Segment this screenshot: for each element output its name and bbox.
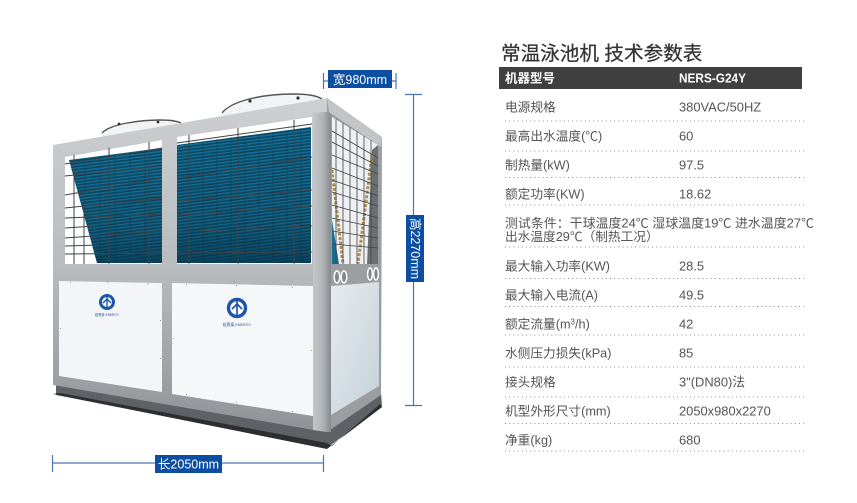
heat pump unit [53, 94, 382, 449]
coil: left [69, 148, 162, 263]
table header: NERS-G24Y [679, 72, 747, 86]
panel: left white [59, 281, 162, 392]
row: connection [505, 374, 745, 390]
row: rated flow: 额定流量(m [505, 318, 571, 332]
dimension: length [52, 455, 324, 473]
dimension: width: 宽980mm [333, 72, 387, 87]
dimension: length: 长2050mm [158, 458, 219, 472]
fan: front [102, 120, 181, 145]
row: rated flow: 3 [571, 318, 576, 326]
row: max input power [505, 258, 704, 274]
row: max outlet temp: 最高出水温度(℃) [505, 128, 602, 144]
logo: center: 纽恩泰 ENERGY [223, 322, 252, 327]
dimension: width [324, 70, 396, 89]
window: right [332, 117, 378, 264]
front frame [53, 98, 327, 432]
fan: rear [222, 94, 322, 120]
row: dimensions: 机型外形尺寸(mm) [505, 404, 611, 418]
logo: left [95, 296, 120, 317]
coil: center [177, 127, 311, 263]
row: connection: 3"(DN80)法 [679, 374, 745, 390]
table header: 机器型号 [505, 70, 555, 86]
row: rated flow: 42 [679, 316, 693, 332]
logo: left: 纽恩泰 ENERGY [95, 312, 120, 317]
row: max outlet temp [505, 128, 693, 144]
row: net weight: 680 [679, 432, 701, 448]
dimension: height [405, 94, 424, 406]
row: net weight [505, 432, 701, 448]
row: rated flow [505, 316, 693, 332]
row: max input current [505, 288, 704, 302]
panel: right side [331, 282, 379, 415]
wire mesh [65, 119, 378, 264]
row: net weight: 净重(kg) [505, 432, 552, 448]
row: max input current: 最大输入电流(A) [505, 288, 598, 302]
row: dimensions: 2050x980x2270 [679, 404, 771, 418]
row: pressure loss [505, 346, 693, 360]
row: heating capacity: 97.5 [679, 158, 704, 172]
side frame [327, 98, 382, 432]
pipe ports [334, 268, 378, 283]
row: test conditions: 出水温度29℃（制热工况） [505, 229, 659, 244]
window: center [177, 117, 312, 264]
base [53, 385, 382, 449]
row: max input power: 最大输入功率(KW) [505, 258, 610, 274]
row: power supply [505, 100, 761, 114]
row: power supply: 380VAC/50HZ [679, 100, 761, 114]
table header [499, 67, 802, 89]
row: heating capacity [505, 158, 704, 172]
row: pressure loss: 85 [679, 346, 693, 360]
row: connection: 接头规格 [505, 374, 556, 390]
dimension: height: 高2270mm [408, 218, 423, 279]
window: left [65, 140, 162, 264]
row: test conditions [505, 216, 814, 244]
row: rated flow: /h) [575, 318, 590, 332]
row: rated power: 18.62 [679, 186, 711, 202]
row: max outlet temp: 60 [679, 128, 693, 144]
table rows [505, 100, 814, 451]
row: power supply: 电源规格 [505, 100, 556, 114]
row: max input power: 28.5 [679, 258, 704, 274]
row: heating capacity: 制热量(kW) [505, 158, 570, 172]
row: dimensions [505, 404, 771, 418]
title: 常温泳池机 技术参数表 [501, 43, 702, 65]
row: rated power: 额定功率(KW) [505, 186, 585, 202]
row: rated power [505, 186, 711, 202]
row: pressure loss: 水侧压力损失(kPa) [505, 346, 611, 360]
logo: center [223, 300, 252, 327]
row: test conditions: 测试条件：干球温度24℃ 湿球温度19℃ 进水温度27℃ [505, 216, 814, 230]
corner post [313, 112, 331, 432]
panel: center white [172, 283, 313, 416]
row: max input current: 49.5 [679, 288, 704, 302]
